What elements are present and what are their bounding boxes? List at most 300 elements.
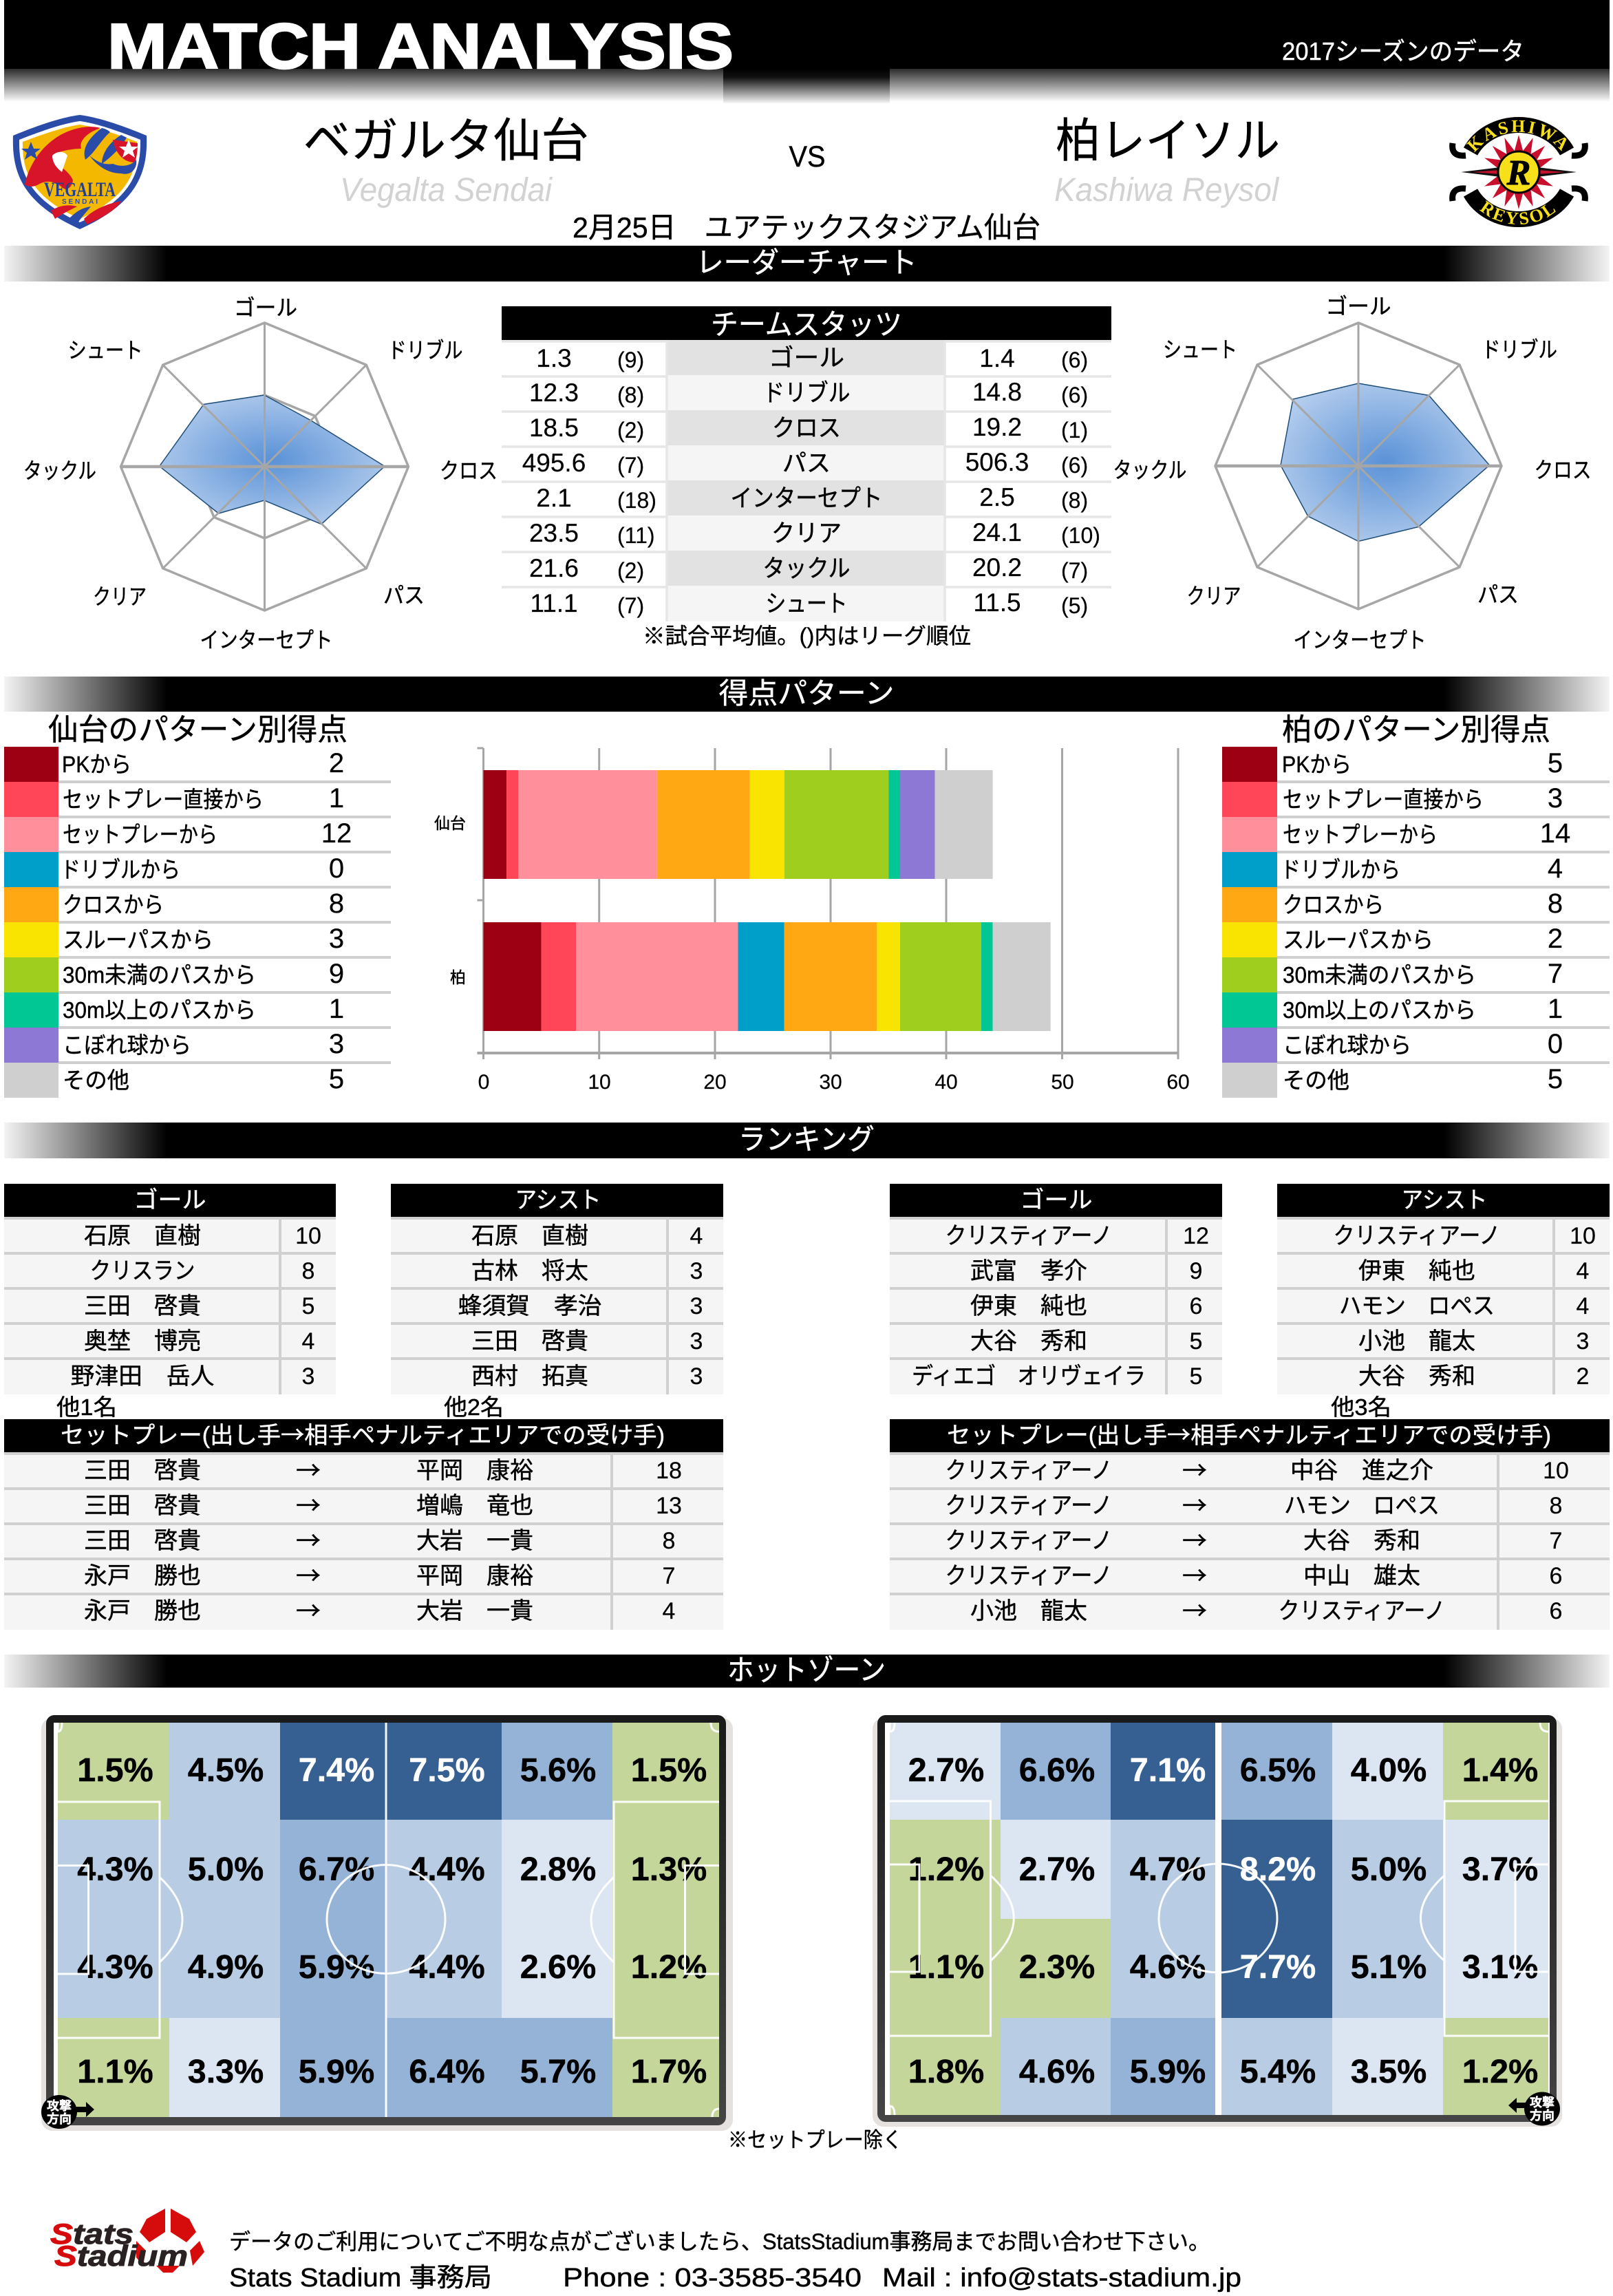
- set play table: Sendai: 8: [663, 1528, 675, 1554]
- stacked bar chart: goals by pattern: [434, 748, 1190, 1094]
- legend panel: Kashiwa scoring patterns: 14: [1540, 818, 1570, 849]
- row: tackles: 21.6: [529, 554, 579, 582]
- row: dribbles: 14.8: [972, 378, 1022, 406]
- title: MATCH ANALYSIS: [107, 10, 734, 82]
- row: dribbles: ドリブル: [762, 380, 851, 407]
- ranking table: Sendai goals: 奥埜 博亮: [84, 1328, 201, 1354]
- legend panel: Kashiwa scoring patterns: 5: [1548, 1064, 1563, 1094]
- percentage labels: 1.1%: [908, 1948, 984, 1986]
- legend panel: Sendai scoring patterns: こぼれ球から: [63, 1032, 191, 1058]
- legend panel: Sendai scoring patterns: 2: [329, 748, 344, 778]
- legend panel: Kashiwa scoring patterns: スルーパスから: [1283, 927, 1433, 953]
- contact information: データのご利用についてご不明な点がございましたら、StatsStadium事務局までお問い合わせ下さい。: [229, 2229, 1210, 2254]
- icon: Kashiwa Reysol crest: R: [1506, 153, 1530, 193]
- legend panel: Kashiwa scoring patterns: 30m以上のパスから: [1283, 997, 1476, 1023]
- row: crosses: [529, 413, 1088, 443]
- team name: Sendai: Vegalta Sendai: [340, 172, 553, 209]
- notes: other players: 他1名: [56, 1394, 117, 1420]
- percentage labels: 4.9%: [188, 1948, 264, 1986]
- zone cells: [890, 1723, 1548, 2115]
- data polygon: [1281, 383, 1489, 541]
- ranking table: Kashiwa assists: [1277, 1184, 1610, 1394]
- row: clears: (10): [1061, 523, 1100, 548]
- icon: attack direction: 攻撃: [47, 2098, 72, 2113]
- percentage labels: 4.3%: [77, 1851, 153, 1888]
- set play table: Sendai: セットプレー(出し手→相手ペナルティエリアでの受け手): [61, 1416, 665, 1450]
- row: clears: 24.1: [972, 518, 1022, 546]
- contact information: Stats Stadium 事務局: [229, 2264, 492, 2293]
- row: goals: ゴール: [769, 345, 844, 372]
- section heading: scoring patterns: 得点パターン: [718, 677, 895, 710]
- row: crosses: (2): [617, 418, 644, 443]
- legend heading: 仙台のパターン別得点: [48, 713, 348, 747]
- row: crosses: 18.5: [529, 414, 579, 442]
- row: shots: 11.1: [530, 589, 578, 617]
- ranking table: Kashiwa assists: 4: [1577, 1258, 1589, 1284]
- legend panel: Sendai scoring patterns: 8: [329, 889, 344, 919]
- set play table: Kashiwa: 8: [1550, 1493, 1562, 1519]
- percentage labels: 2.7%: [908, 1752, 984, 1789]
- set play table: Kashiwa: 7: [1550, 1528, 1562, 1554]
- ranking table: Kashiwa assists: 4: [1577, 1293, 1589, 1319]
- legend panel: Kashiwa scoring patterns: 5: [1548, 748, 1563, 778]
- legend panel: Sendai scoring patterns: 3: [329, 924, 344, 954]
- percentage labels: 4.4%: [409, 1948, 485, 1986]
- heat map pitch: Kashiwa: [873, 1715, 1562, 2127]
- zone cells: [58, 1723, 719, 2117]
- row: shots: [530, 588, 1088, 618]
- section heading: radar chart: レーダーチャート: [696, 246, 917, 279]
- legend panel: Sendai scoring patterns: 3: [329, 1029, 344, 1059]
- x axis labels: 60: [1166, 1071, 1190, 1094]
- set play table: Kashiwa: →: [1182, 1521, 1207, 1557]
- legend panel: Kashiwa scoring patterns: 1: [1548, 994, 1563, 1024]
- percentage labels: 4.6%: [1130, 1948, 1206, 1986]
- ranking table: Sendai assists: 3: [690, 1328, 703, 1354]
- set play table: Kashiwa: 6: [1550, 1563, 1562, 1589]
- row: clears: (11): [617, 523, 655, 548]
- percentage labels: 1.8%: [908, 2053, 984, 2090]
- row: tackles: タックル: [762, 555, 851, 582]
- percentage labels: 1.2%: [908, 1851, 984, 1888]
- ranking table: Sendai goals: 野津田 岳人: [70, 1363, 215, 1390]
- percentage labels: 6.5%: [1240, 1752, 1316, 1789]
- table footnote: ※試合平均値。()内はリーグ順位: [643, 624, 971, 648]
- percentage labels: 6.7%: [299, 1851, 374, 1888]
- category labels: 仙台: [434, 814, 466, 832]
- axis labels: クロス: [440, 458, 498, 483]
- legend panel: Sendai scoring patterns: 30m以上のパスから: [63, 997, 256, 1023]
- icon: attack direction: 攻撃: [1530, 2095, 1555, 2109]
- heat map pitch: Sendai: [41, 1715, 733, 2131]
- legend panel: Sendai scoring patterns: PKから: [62, 752, 131, 777]
- percentage labels: 4.6%: [1019, 2053, 1095, 2090]
- icon: Stats Stadium logo: Stats: [50, 2218, 133, 2250]
- season note: 2017シーズンのデータ: [1282, 37, 1524, 65]
- percentage labels: 7.1%: [1130, 1752, 1206, 1789]
- percentage labels: [77, 1752, 707, 2090]
- axis labels: [1113, 294, 1591, 652]
- legend panel: Kashiwa scoring patterns: PKから: [1282, 752, 1352, 777]
- section heading: rankings: [4, 1123, 1610, 1158]
- set play table: Kashiwa: クリスティアーノ: [946, 1458, 1112, 1484]
- ranking table: Kashiwa assists: クリスティアーノ: [1334, 1223, 1500, 1249]
- ranking table: Kashiwa assists: 2: [1577, 1363, 1589, 1390]
- row: passes: (6): [1061, 453, 1088, 478]
- ranking table: Sendai goals: 石原 直樹: [84, 1223, 201, 1249]
- ranking table: Kashiwa assists: 大谷 秀和: [1358, 1363, 1475, 1390]
- footnote: set plays excluded: ※セットプレー除く: [728, 2128, 902, 2152]
- ranking table: Kashiwa goals: ゴール: [1020, 1187, 1093, 1213]
- x axis labels: 10: [588, 1071, 611, 1094]
- legend panel: Sendai scoring patterns: 9: [329, 959, 344, 989]
- percentage labels: 1.7%: [631, 2053, 707, 2090]
- section heading: hot zones: [4, 1654, 1610, 1688]
- legend panel: Sendai scoring patterns: 12: [321, 818, 352, 849]
- team name: Kashiwa: [1054, 115, 1280, 209]
- legend panel: Kashiwa scoring patterns: 4: [1548, 853, 1563, 884]
- ranking table: Sendai assists: 3: [690, 1258, 703, 1284]
- set play table: Kashiwa: セットプレー(出し手→相手ペナルティエリアでの受け手): [947, 1416, 1551, 1450]
- ranking table: Sendai assists: 三田 啓貴: [471, 1328, 588, 1354]
- percentage labels: 6.4%: [409, 2053, 485, 2090]
- row: tackles: 20.2: [972, 553, 1022, 582]
- legend panel: Kashiwa scoring patterns: ドリブルから: [1281, 857, 1400, 882]
- set play table: Kashiwa: →: [1182, 1451, 1207, 1487]
- set play table: Sendai: 平岡 康裕: [416, 1458, 533, 1484]
- row: dribbles: (8): [617, 383, 644, 407]
- x axis labels: 30: [819, 1071, 842, 1094]
- axis labels: タックル: [1113, 458, 1186, 482]
- ranking table: Sendai assists: 西村 拓真: [471, 1363, 588, 1390]
- legend panel: Kashiwa scoring patterns: 3: [1548, 783, 1563, 814]
- ranking table: Kashiwa assists: ハモン ロペス: [1339, 1293, 1495, 1319]
- row: shots: (7): [617, 593, 644, 618]
- percentage labels: 1.4%: [1462, 1752, 1538, 1789]
- ranking table: Kashiwa goals: 5: [1190, 1363, 1202, 1390]
- percentage labels: 4.7%: [1130, 1851, 1206, 1888]
- row: passes: パス: [782, 450, 831, 477]
- legend panel: Sendai scoring patterns: 5: [329, 1064, 344, 1094]
- set play table: Sendai: 永戸 勝也: [84, 1598, 201, 1624]
- row: goals: 1.4: [979, 344, 1015, 372]
- set play table: Sendai: →: [296, 1451, 321, 1487]
- ranking table: Sendai assists: [391, 1184, 723, 1394]
- contact information: Phone : 03-3585-3540: [563, 2264, 862, 2293]
- percentage labels: 8.2%: [1240, 1851, 1316, 1888]
- row: interceptions: 2.1: [536, 484, 572, 512]
- percentage labels: 5.4%: [1240, 2053, 1316, 2090]
- ranking table: Sendai goals: 5: [302, 1293, 314, 1319]
- row: interceptions: [536, 483, 1088, 513]
- axis labels: クリア: [93, 584, 147, 609]
- notes: other players: [56, 1394, 1391, 1420]
- legend panel: Sendai scoring patterns: セットプレーから: [63, 822, 217, 847]
- ranking table: Sendai assists: 古林 将太: [471, 1258, 588, 1284]
- legend panel: Sendai scoring patterns: スルーパスから: [63, 927, 213, 953]
- percentage labels: 5.1%: [1351, 1948, 1427, 1986]
- set play table: Sendai: →: [296, 1486, 321, 1522]
- row: dribbles: 12.3: [529, 379, 579, 407]
- set play table: Sendai: →: [296, 1591, 321, 1627]
- percentage labels: 5.9%: [1130, 2053, 1206, 2090]
- set play table: Kashiwa: クリスティアーノ: [946, 1493, 1112, 1519]
- percentage labels: 6.6%: [1019, 1752, 1095, 1789]
- icon: Kashiwa Reysol crest: REYSOL: [1480, 200, 1556, 224]
- ranking table: Sendai assists: 蜂須賀 孝治: [458, 1293, 601, 1319]
- legend panel: Kashiwa scoring patterns: こぼれ球から: [1283, 1032, 1411, 1058]
- percentage labels: 5.0%: [188, 1851, 264, 1888]
- icon: attack direction: [1508, 2092, 1560, 2125]
- icon: attack direction: 方向: [1530, 2108, 1555, 2123]
- set play table: Kashiwa: クリスティアーノ: [946, 1563, 1112, 1589]
- ranking table: Kashiwa goals: [890, 1184, 1222, 1394]
- axis labels: インターセプト: [200, 628, 333, 652]
- row: tackles: (2): [617, 558, 644, 583]
- percentage labels: 2.3%: [1019, 1948, 1095, 1986]
- row: tackles: (7): [1061, 558, 1088, 583]
- legend panel: Kashiwa scoring patterns: 2: [1548, 924, 1563, 954]
- axis labels: [23, 295, 498, 652]
- set play table: Sendai: 三田 啓貴: [84, 1528, 201, 1554]
- team name: Kashiwa: Kashiwa Reysol: [1054, 172, 1279, 209]
- set play table: Kashiwa: クリスティアーノ: [946, 1528, 1112, 1554]
- ranking table: Sendai goals: [4, 1184, 336, 1394]
- set play table: Kashiwa: →: [1182, 1556, 1207, 1592]
- contact information: Mail : info@stats-stadium.jp: [882, 2264, 1241, 2293]
- percentage labels: 4.5%: [188, 1752, 264, 1789]
- row: passes: (7): [617, 453, 644, 478]
- percentage labels: 1.5%: [77, 1752, 153, 1789]
- icon: Vegalta Sendai crest: VEGALTA: [44, 178, 116, 201]
- radar chart: Sendai: [23, 295, 498, 652]
- axis labels: ゴール: [1325, 294, 1391, 319]
- axis labels: クリア: [1186, 584, 1241, 608]
- percentage labels: [908, 1752, 1538, 2090]
- set play table: Kashiwa: 大谷 秀和: [1303, 1528, 1420, 1554]
- ranking table: Kashiwa goals: 5: [1190, 1328, 1202, 1354]
- row: goals: (9): [617, 348, 644, 372]
- icon: Stats Stadium logo: Stadium: [54, 2240, 188, 2272]
- percentage labels: 7.7%: [1240, 1948, 1316, 1986]
- legend panel: Sendai scoring patterns: その他: [63, 1067, 129, 1093]
- percentage labels: 2.6%: [520, 1948, 596, 1986]
- percentage labels: 1.2%: [1462, 2053, 1538, 2090]
- pitch markings: [56, 1723, 719, 2117]
- category labels: [434, 814, 466, 986]
- set play table: Sendai: 三田 啓貴: [84, 1493, 201, 1519]
- x axis labels: 40: [934, 1071, 958, 1094]
- ranking table: Sendai goals: クリスラン: [89, 1258, 195, 1284]
- data polygon: [160, 395, 385, 524]
- ranking table: Kashiwa goals: ディエゴ オリヴェイラ: [912, 1363, 1146, 1390]
- header banner: [4, 0, 1610, 103]
- icon: Kashiwa Reysol crest: KASHIWA: [1466, 120, 1566, 153]
- percentage labels: 7.5%: [409, 1752, 485, 1789]
- set play table: Sendai: 18: [656, 1458, 682, 1484]
- legend panel: Kashiwa scoring patterns: 8: [1548, 889, 1563, 919]
- team stats table: [502, 306, 1111, 648]
- notes: other players: 他2名: [444, 1394, 504, 1420]
- row: clears: 23.5: [529, 519, 579, 547]
- percentage labels: 3.5%: [1351, 2053, 1427, 2090]
- ranking table: Kashiwa goals: 武富 孝介: [970, 1258, 1087, 1284]
- legend panel: Kashiwa scoring patterns: セットプレー直接から: [1283, 787, 1484, 812]
- ranking table: Kashiwa assists: 小池 龍太: [1358, 1328, 1475, 1354]
- match date and venue: 2月25日 ユアテックスタジアム仙台: [573, 211, 1040, 244]
- section heading: radar chart: [4, 246, 1610, 281]
- bar: Kashiwa: [483, 922, 1051, 1031]
- set play table: Sendai: 大岩 一貴: [416, 1598, 533, 1624]
- row: interceptions: インターセプト: [731, 485, 882, 512]
- axis labels: シュート: [1163, 337, 1237, 362]
- row: goals: (6): [1061, 348, 1088, 372]
- row: clears: クリア: [771, 520, 842, 547]
- row: tackles: [529, 553, 1088, 583]
- table header: チームスタッツ: [711, 308, 902, 341]
- ranking table: Kashiwa goals: 6: [1190, 1293, 1202, 1319]
- icon: Kashiwa Reysol crest: [1449, 117, 1588, 227]
- set play table: Kashiwa: →: [1182, 1591, 1207, 1627]
- ranking table: Kashiwa goals: 9: [1190, 1258, 1202, 1284]
- team name: Sendai: [303, 115, 589, 209]
- icon: Stats Stadium logo: [50, 2209, 204, 2273]
- row: passes: [522, 448, 1088, 478]
- ranking table: Sendai assists: 4: [690, 1223, 703, 1249]
- team name: Sendai: ベガルタ仙台: [303, 115, 589, 167]
- ranking table: Sendai goals: ゴール: [133, 1187, 206, 1213]
- legend panel: Sendai scoring patterns: [4, 713, 391, 1098]
- set play table: Kashiwa: 10: [1543, 1458, 1569, 1484]
- percentage labels: 5.0%: [1351, 1851, 1427, 1888]
- ranking table: Sendai goals: 三田 啓貴: [84, 1293, 201, 1319]
- radar chart: Kashiwa: [1113, 294, 1591, 652]
- ranking table: Sendai assists: アシスト: [515, 1187, 601, 1213]
- percentage labels: 7.4%: [299, 1752, 374, 1789]
- legend panel: Sendai scoring patterns: 1: [329, 994, 344, 1024]
- row: dribbles: [529, 378, 1088, 407]
- set play table: Kashiwa: 中山 雄太: [1303, 1563, 1420, 1589]
- row: interceptions: (18): [617, 488, 656, 513]
- bar: Sendai: [483, 770, 993, 879]
- x axis labels: 20: [703, 1071, 727, 1094]
- legend panel: Sendai scoring patterns: 1: [329, 783, 344, 814]
- section heading: hot zones: ホットゾーン: [727, 1654, 886, 1686]
- ranking table: Sendai assists: 石原 直樹: [471, 1223, 588, 1249]
- row: crosses: クロス: [772, 415, 841, 442]
- legend panel: Sendai scoring patterns: 0: [329, 853, 344, 884]
- legend panel: Sendai scoring patterns: 30m未満のパスから: [63, 962, 256, 988]
- row: passes: 495.6: [522, 449, 586, 477]
- percentage labels: 1.2%: [631, 1948, 707, 1986]
- row: shots: 11.5: [973, 588, 1021, 617]
- ranking table: Sendai assists: 3: [690, 1293, 703, 1319]
- percentage labels: 1.1%: [77, 2053, 153, 2090]
- set play table: Kashiwa: 小池 龍太: [970, 1598, 1087, 1624]
- row: shots: (5): [1061, 593, 1088, 618]
- percentage labels: 5.9%: [299, 2053, 374, 2090]
- legend panel: Kashiwa scoring patterns: 7: [1548, 959, 1563, 989]
- notes: other players: 他3名: [1331, 1394, 1391, 1420]
- set play table: Sendai: 4: [663, 1598, 675, 1624]
- set play table: Kashiwa: クリスティアーノ: [1279, 1598, 1445, 1624]
- ranking table: Kashiwa assists: 3: [1577, 1328, 1589, 1354]
- percentage labels: 4.0%: [1351, 1752, 1427, 1789]
- section heading: rankings: ランキング: [738, 1123, 875, 1156]
- x axis labels: [478, 1071, 1190, 1094]
- percentage labels: 5.6%: [520, 1752, 596, 1789]
- ranking table: Sendai goals: 8: [302, 1258, 314, 1284]
- icon: attack direction: 方向: [47, 2112, 72, 2126]
- ranking table: Kashiwa assists: アシスト: [1401, 1187, 1488, 1213]
- percentage labels: 1.3%: [631, 1851, 707, 1888]
- set play table: Sendai: →: [296, 1556, 321, 1592]
- row: passes: 506.3: [965, 448, 1029, 476]
- table header: [502, 306, 1111, 341]
- row: interceptions: (8): [1061, 488, 1088, 513]
- percentage labels: 5.7%: [520, 2053, 596, 2090]
- ranking table: Sendai assists: 3: [690, 1363, 703, 1390]
- set play table: Sendai: 大岩 一貴: [416, 1528, 533, 1554]
- ranking table: Sendai goals: 3: [302, 1363, 314, 1390]
- ranking table: Kashiwa goals: 伊東 純也: [970, 1293, 1087, 1319]
- set play table: Sendai: 永戸 勝也: [84, 1563, 201, 1589]
- ranking table: Kashiwa assists: 10: [1570, 1223, 1596, 1249]
- ranking table: Kashiwa goals: クリスティアーノ: [946, 1223, 1112, 1249]
- axis labels: シュート: [67, 338, 143, 363]
- icon: Vegalta Sendai crest: SENDAI: [62, 198, 98, 206]
- category labels: 柏: [450, 968, 466, 986]
- percentage labels: 4.3%: [77, 1948, 153, 1986]
- ranking table: Kashiwa goals: 大谷 秀和: [970, 1328, 1087, 1354]
- percentage labels: 3.7%: [1462, 1851, 1538, 1888]
- pitch markings: [888, 1723, 1548, 2115]
- axis labels: ドリブル: [1482, 337, 1557, 362]
- legend panel: Kashiwa scoring patterns: その他: [1283, 1067, 1349, 1093]
- set play table: Kashiwa: →: [1182, 1486, 1207, 1522]
- icon: Vegalta Sendai crest: [13, 115, 147, 229]
- row: shots: シュート: [765, 591, 848, 617]
- legend panel: Kashiwa scoring patterns: 0: [1548, 1029, 1563, 1059]
- legend panel: Sendai scoring patterns: ドリブルから: [61, 857, 180, 882]
- legend panel: Kashiwa scoring patterns: セットプレーから: [1283, 822, 1438, 847]
- axis labels: タックル: [23, 458, 96, 483]
- axis labels: ゴール: [234, 295, 297, 320]
- contact information: [229, 2229, 1241, 2293]
- percentage labels: 3.1%: [1462, 1948, 1538, 1986]
- set play table: Sendai: [4, 1416, 723, 1630]
- row: goals: 1.3: [536, 344, 572, 372]
- section heading: scoring patterns: [4, 677, 1610, 712]
- set play table: Sendai: 平岡 康裕: [416, 1563, 533, 1589]
- percentage labels: 5.9%: [299, 1948, 374, 1986]
- ranking table: Sendai goals: 10: [295, 1223, 321, 1249]
- set play table: Sendai: →: [296, 1521, 321, 1557]
- set play table: Kashiwa: 中谷 進之介: [1290, 1458, 1433, 1484]
- legend heading: 柏のパターン別得点: [1282, 713, 1550, 747]
- team name: Kashiwa: 柏レイソル: [1056, 115, 1280, 167]
- set play table: Kashiwa: 6: [1550, 1598, 1562, 1624]
- percentage labels: 2.7%: [1019, 1851, 1095, 1888]
- row: dribbles: (6): [1061, 383, 1088, 407]
- axis labels: パス: [1477, 582, 1519, 607]
- set play table: Kashiwa: ハモン ロペス: [1284, 1493, 1440, 1519]
- row: crosses: 19.2: [972, 413, 1022, 441]
- legend panel: Kashiwa scoring patterns: [1222, 713, 1610, 1098]
- row: interceptions: 2.5: [979, 483, 1015, 511]
- percentage labels: 4.4%: [409, 1851, 485, 1888]
- ranking table: Kashiwa assists: 伊東 純也: [1358, 1258, 1475, 1284]
